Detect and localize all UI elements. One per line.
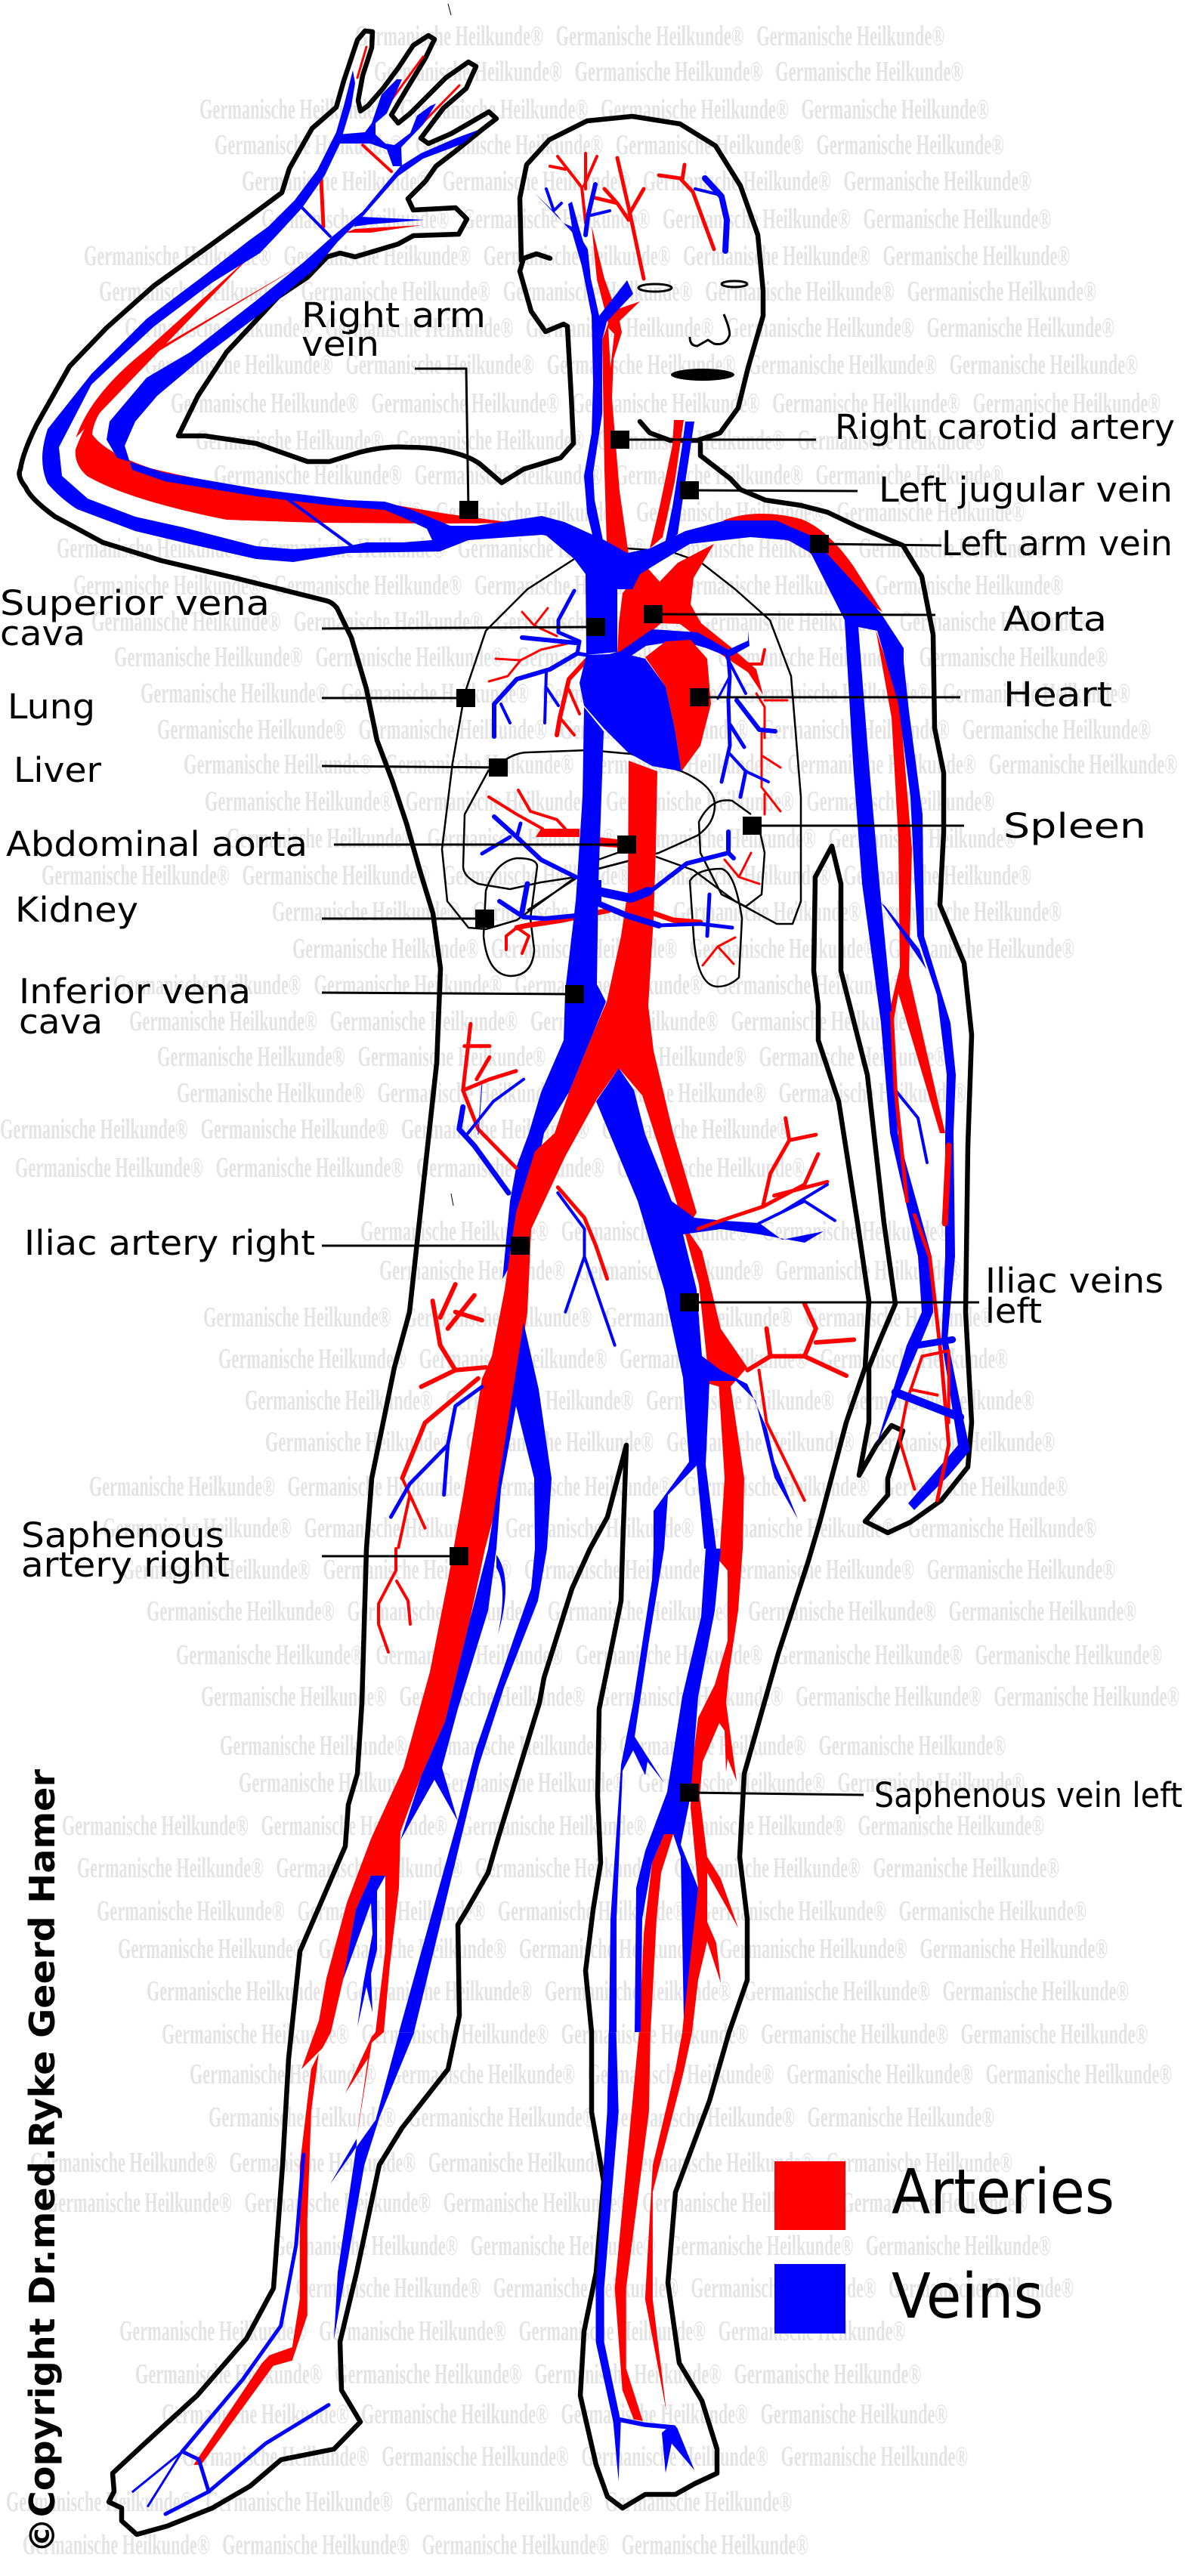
labels: Iliac artery right [24, 1223, 315, 1263]
face [638, 281, 747, 381]
labels: Superior vena [0, 583, 270, 623]
labels: cava [0, 613, 85, 653]
marker squares [450, 431, 829, 1802]
hand arteries [321, 47, 459, 227]
labels: Abdominal aorta [6, 824, 308, 864]
iliac branches and forearm detail [391, 1013, 960, 1547]
labels: left [985, 1291, 1042, 1331]
labels: Right arm [301, 295, 486, 335]
labels [0, 295, 1182, 1815]
leader lines [322, 369, 979, 1795]
labels: Kidney [15, 890, 138, 930]
labels: Heart [1003, 675, 1112, 715]
lung arteries [489, 608, 787, 814]
labels: artery right [21, 1545, 230, 1585]
labels: Inferior vena [19, 971, 251, 1012]
labels: Liver [14, 750, 102, 790]
lung veins [494, 591, 775, 797]
copyright: ©Copyright Dr.med.Ryke Geerd Hamer [22, 1769, 63, 2553]
labels: Left arm vein [941, 524, 1173, 564]
labels: vein [301, 324, 379, 364]
labels: Spleen [1003, 806, 1146, 846]
aorta and iliac arteries [301, 761, 747, 2139]
labels: Saphenous [21, 1515, 224, 1555]
leg, renal and liver veins [343, 817, 824, 2032]
lower leg vessels [133, 2032, 694, 2514]
arteries: arm, neck and lungs [76, 47, 945, 1133]
heart [580, 640, 711, 771]
legend [774, 2157, 1114, 2334]
labels: cava [19, 1002, 103, 1042]
legend: Veins [892, 2261, 1043, 2333]
small artery: right thigh [379, 1549, 410, 1652]
labels: Iliac veins [985, 1261, 1164, 1301]
head arteries [550, 153, 714, 279]
labels: Aorta [1003, 599, 1107, 639]
labels: Lung [8, 687, 95, 727]
thin organ outlines [442, 548, 801, 987]
liver and kidney arteries [489, 790, 759, 965]
labels: Left jugular vein [879, 470, 1173, 510]
body outline [20, 4, 972, 2534]
veins: arms, neck, lungs [42, 70, 970, 1510]
labels: Right carotid artery [835, 407, 1175, 447]
legend: Arteries [892, 2157, 1114, 2229]
